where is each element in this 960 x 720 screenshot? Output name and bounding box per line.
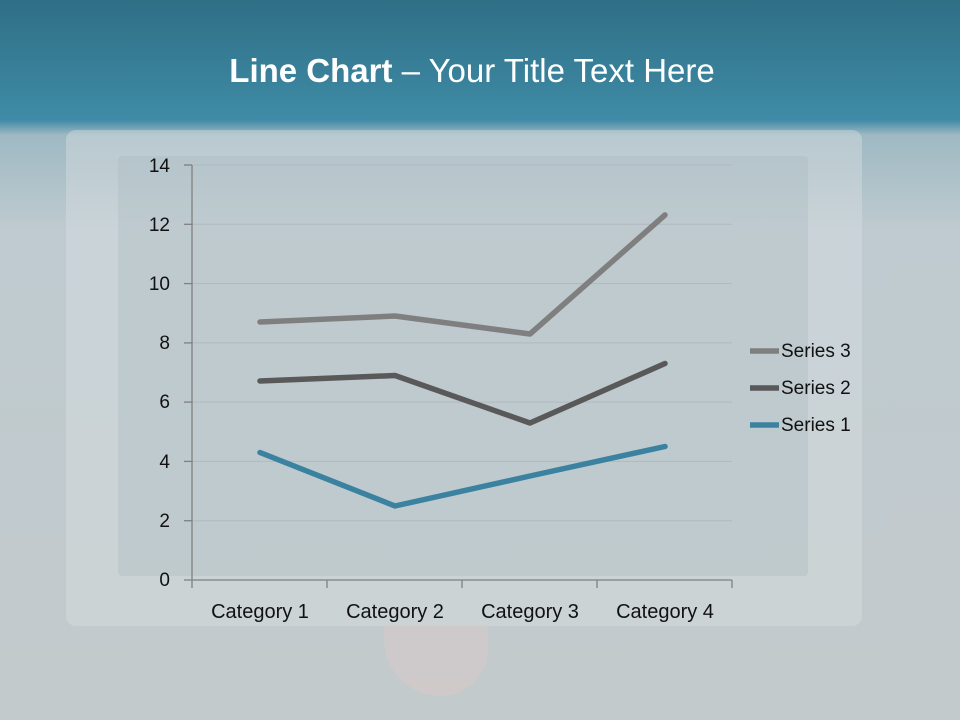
y labels: 2 bbox=[159, 511, 170, 532]
x labels: Category 3 bbox=[481, 601, 579, 623]
series 1 bbox=[260, 446, 665, 506]
y labels: 10 bbox=[149, 274, 170, 295]
x labels: Category 2 bbox=[346, 601, 444, 623]
title: Line Chart – Your Title Text Here bbox=[229, 52, 715, 89]
finger bbox=[384, 626, 488, 696]
legend: Series 3 bbox=[781, 341, 851, 362]
legend: Series 2 bbox=[781, 378, 851, 399]
y labels: 6 bbox=[159, 392, 170, 413]
x labels: Category 4 bbox=[616, 601, 714, 623]
legend bbox=[750, 341, 851, 436]
y labels: 12 bbox=[149, 215, 170, 236]
y labels: 4 bbox=[159, 452, 170, 473]
series 2 bbox=[260, 364, 665, 423]
legend: Series 1 bbox=[781, 415, 851, 436]
y labels: 0 bbox=[159, 570, 170, 591]
screen bbox=[118, 156, 808, 576]
axes bbox=[184, 165, 732, 588]
y labels: 14 bbox=[149, 156, 170, 177]
x labels: Category 1 bbox=[211, 601, 309, 623]
y labels bbox=[149, 156, 170, 591]
series 3 bbox=[260, 215, 665, 334]
x labels bbox=[211, 601, 714, 623]
tablet bbox=[66, 130, 862, 626]
y labels: 8 bbox=[159, 333, 170, 354]
